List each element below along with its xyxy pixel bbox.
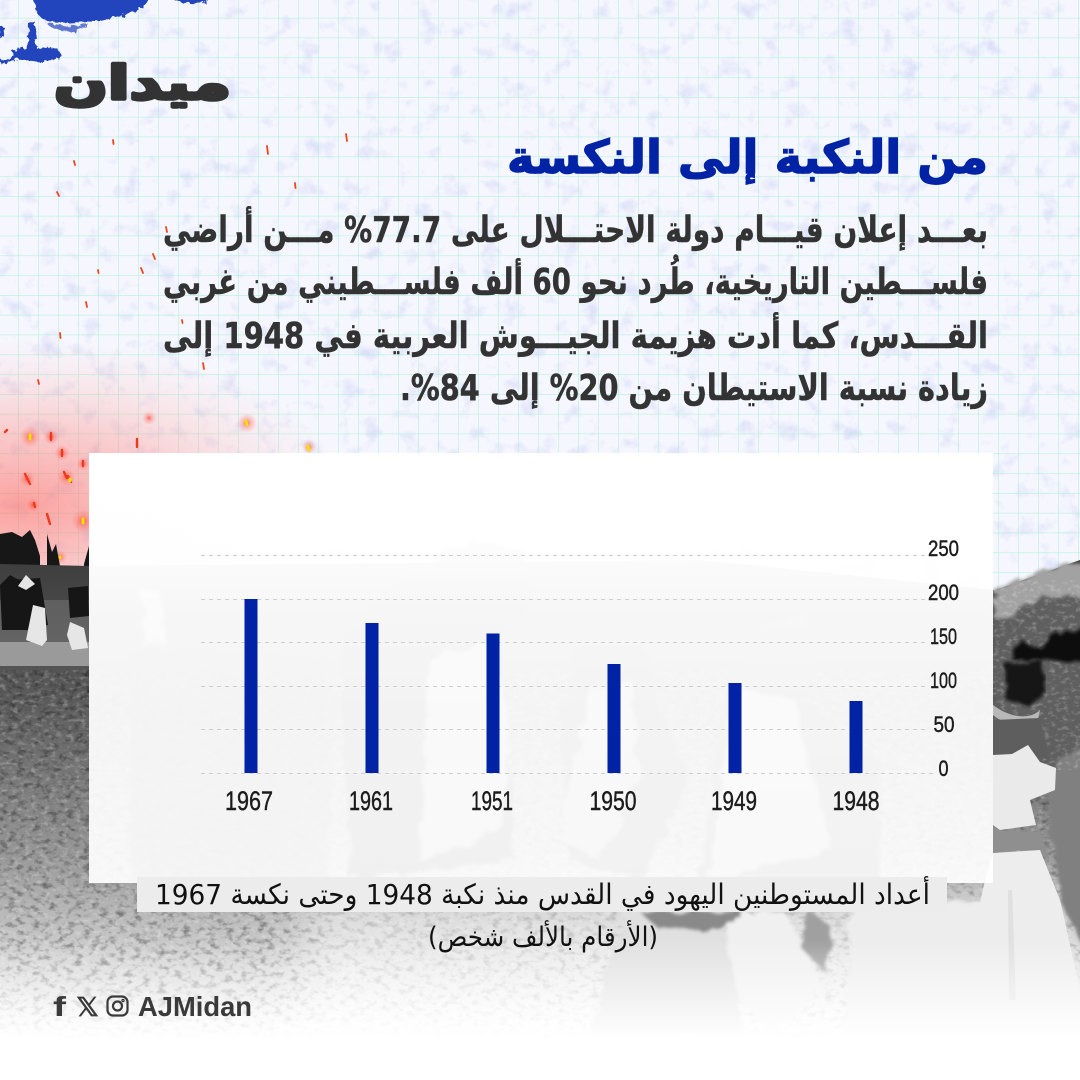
- chart: y axis labels: 50: [934, 712, 954, 737]
- body text: [163, 206, 988, 409]
- icon: facebook: f: [53, 991, 67, 1022]
- photo: figures below the chart: [590, 900, 1080, 1040]
- red fire glow: [0, 330, 360, 600]
- chart: y axis labels: 150: [930, 624, 957, 649]
- chart: x axis labels: 1950: [590, 786, 636, 816]
- chart: x axis labels: 1967: [225, 786, 273, 816]
- chart: y axis labels: 100: [930, 668, 957, 693]
- chart: x axis labels: 1948: [832, 786, 880, 816]
- icon: instagram: [108, 996, 128, 1016]
- logo: Midan: ميدان: [54, 56, 231, 111]
- icon: X: 𝕏: [76, 993, 99, 1023]
- chart: x axis labels: [225, 786, 880, 816]
- photo: central crowd: [130, 540, 880, 880]
- chart: y axis labels: 0: [938, 756, 948, 781]
- chart: y axis labels: 200: [928, 580, 959, 605]
- chart: bars: [244, 599, 862, 773]
- chart: x axis labels: 1961: [349, 786, 393, 816]
- photo: grass field: [0, 560, 1080, 1080]
- caption note: (الأرقام بالألف شخص): [428, 919, 658, 953]
- chart: x axis labels: 1951: [471, 786, 513, 816]
- embers: flying sparks: [5, 134, 347, 564]
- chart: y axis labels: 250: [928, 536, 959, 561]
- title: من النكبة إلى النكسة: [507, 130, 988, 185]
- body text: زيادة نسبة الاستيطان من 20% إلى 84%.: [400, 368, 988, 409]
- photo: woman with bundle, right: [950, 565, 1080, 1040]
- footer: social handle: [53, 991, 252, 1023]
- handle text: AJMidan: [138, 991, 252, 1022]
- chart: gridlines: [201, 556, 935, 774]
- blue ink splash, top-left: [0, 0, 218, 65]
- photo: refugees walking, monochrome: [0, 530, 1080, 1080]
- chart: x axis labels: 1949: [711, 786, 757, 816]
- photo: white clothing of walkers, left: [18, 575, 88, 650]
- photo: tree line on horizon: [0, 530, 94, 568]
- photo: distant refugees, left: [0, 575, 89, 630]
- caption bar: أعداد المستوطنين اليهود في القدس منذ نكبة 1948 وحتى نكسة 1967: [155, 875, 930, 911]
- chart: y axis labels: [928, 536, 959, 781]
- panel: chart card: [89, 453, 993, 883]
